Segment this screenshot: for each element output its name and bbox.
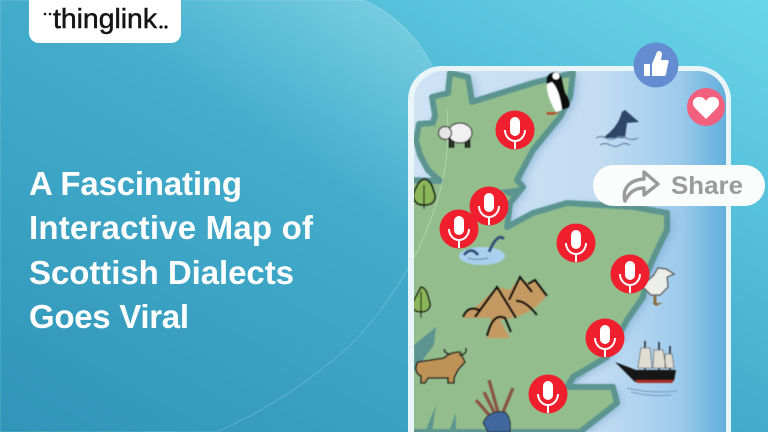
icon: tree north	[414, 179, 435, 209]
decorative translucent shape	[0, 0, 448, 432]
logo badge	[29, 0, 181, 43]
icon: bagpipes	[476, 380, 513, 432]
share button	[593, 165, 765, 206]
logo badge: thinglink	[53, 3, 158, 34]
title: Interactive Map of	[29, 209, 314, 246]
phone frame	[408, 66, 731, 432]
icon: seagull	[642, 268, 674, 306]
land: Scotland	[404, 73, 667, 432]
icon: sailing ship	[615, 341, 677, 396]
icon: whale tail	[596, 110, 639, 146]
icon: tree west	[412, 287, 430, 318]
icon: puffin	[546, 72, 570, 115]
title: A Fascinating	[29, 165, 242, 202]
marker: microphone 6	[586, 318, 624, 358]
title: Scottish Dialects	[29, 254, 294, 291]
blob edge over map	[414, 110, 448, 258]
icon: mountains	[463, 277, 547, 338]
share label: Share	[671, 172, 743, 200]
like button	[634, 42, 678, 88]
icon: Loch Ness monster	[459, 237, 505, 265]
marker: microphone 1	[496, 110, 534, 150]
heart button	[687, 88, 725, 126]
marker: microphone 3	[440, 210, 478, 248]
lochs and inlets	[414, 187, 590, 432]
marker: microphone 4	[556, 224, 596, 262]
marker: microphone 7	[528, 374, 568, 414]
map panel	[404, 71, 726, 432]
marker: microphone 5	[610, 254, 650, 294]
icon: highland cow	[416, 348, 466, 383]
marker: microphone 2	[470, 186, 508, 226]
land shadow	[408, 75, 671, 432]
title: Goes Viral	[29, 298, 189, 335]
icon: share arrow	[624, 172, 658, 201]
icon: sheep	[438, 123, 472, 148]
